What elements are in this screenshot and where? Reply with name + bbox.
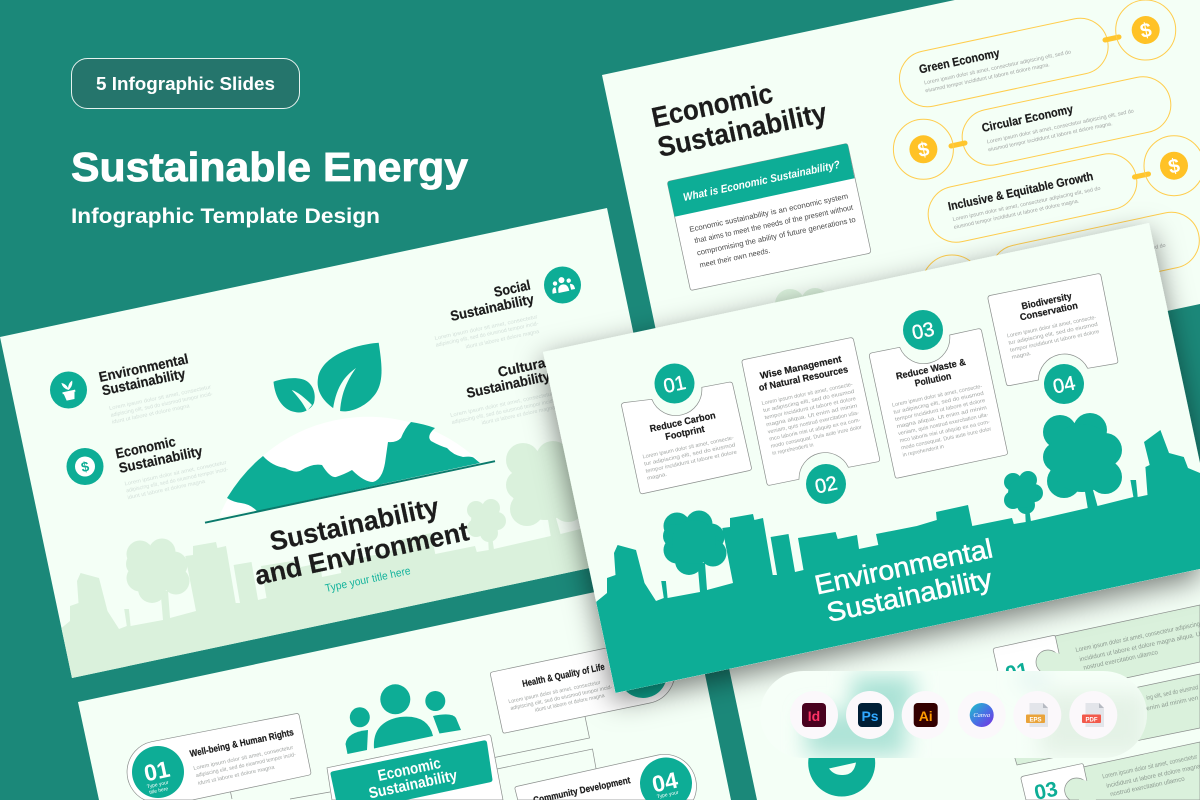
icon: group of people (346, 684, 461, 754)
item: cultural sustainability: idunt ut labore et dolore magna (481, 405, 556, 426)
card: health and quality of life: adipiscing elit, sed do eiusmod tempor incid- (510, 684, 613, 712)
pill: circular economy: eiusmod tempor incididunt ut labore et dolore magna. (988, 121, 1113, 153)
card: community development: 04 (650, 767, 680, 797)
heading: economic sustainability: Sustainability (655, 97, 830, 163)
toolbar: software format badges (760, 671, 1147, 758)
card 02: wise management of natural resources: of Natural Resources (758, 364, 849, 394)
item: economic sustainability: idunt ut labore et dolore magna (127, 479, 206, 501)
card 02: wise management of natural resources: tur adipiscing elit, sed do eiusmod (763, 389, 855, 414)
decorative tree tops (775, 288, 829, 319)
card 01: reduce carbon footprint: Footprint (664, 424, 707, 443)
subtitle: Infographic Template Design (71, 204, 380, 228)
card: well-being and human rights: Type your (146, 780, 169, 790)
callout: what is economic sustainability: Economic sustainability is an economic system (689, 191, 849, 234)
pill: fourth economy item: sed do (1149, 243, 1166, 252)
card: well-being and human rights: Lorem ipsum dolor sit amet, consectetur (193, 745, 294, 772)
card: well-being and human rights: title here (149, 786, 169, 796)
title: sustainability and environment: Sustainability (267, 492, 441, 557)
card 02: wise management of natural resources: magna aliqua. Ut enim ad minim (766, 403, 859, 428)
item: cultural sustainability: Sustainability (465, 368, 552, 401)
item: environmental sustainability: Sustainability (100, 365, 187, 398)
card 02: wise management of natural resources (742, 338, 880, 504)
item: environmental sustainability: idunt ut labore et dolore magna (112, 403, 190, 426)
pill: circular economy: Lorem ipsum dolor sit amet, consectetur adipiscing elit, sed do (986, 108, 1134, 145)
row 2 band (1002, 674, 1200, 765)
card 04: biodiversity conservation: Conservation (1019, 300, 1079, 323)
callout: what is economic sustainability: meet their own needs. (699, 246, 771, 270)
row 3 band (1083, 742, 1200, 800)
card: well-being and human rights: idunt ut labore et dolore magna (198, 765, 275, 787)
card 04: biodiversity conservation: tempor incididunt ut labore et dolore (1010, 329, 1100, 354)
icon: Canva: Canva (973, 712, 990, 719)
skyline with trees (596, 413, 1200, 693)
item: environmental sustainability: adipiscing elit, sed do eiusmod tempor incid- (110, 391, 213, 419)
icon: EPS file (1013, 691, 1061, 739)
row 3 band: nostrud exercitation ullamco (1110, 775, 1186, 798)
pill: inclusive and equitable growth (923, 136, 1200, 247)
item: economic sustainability: $ (80, 458, 91, 475)
pill: circular economy: $ (916, 138, 931, 162)
card 02: wise management of natural resources: in reprehenderit in (772, 442, 814, 457)
card 04: biodiversity conservation (988, 274, 1118, 404)
card 04: biodiversity conservation: tur adipiscing elit, sed do eiusmod (1008, 322, 1098, 347)
icon: sprouting leaves (274, 343, 382, 413)
pill: circular economy (893, 72, 1176, 179)
panel: economic sustainability slide (602, 0, 1200, 416)
pill: green economy: eiusmod tempor incididunt ut labore et dolore magna. (925, 62, 1050, 94)
panel: economic sustainability map slide (78, 573, 731, 800)
icon: InDesign: Id (808, 708, 820, 724)
icon: EPS file: EPS (1029, 717, 1042, 723)
card 04: biodiversity conservation: magna. (1011, 351, 1032, 361)
card: health and quality of life: Lorem ipsum dolor sit amet, consectetur (508, 680, 601, 705)
icon: PDF file: PDF (1086, 717, 1098, 723)
card 01: reduce carbon footprint: magna. (647, 472, 668, 482)
card 03: reduce waste and pollution: 03 (910, 318, 936, 345)
item: social sustainability: Social (492, 277, 532, 300)
item: economic sustainability: Sustainability (117, 443, 204, 476)
item: economic sustainability: Economic (114, 433, 177, 461)
title: sustainability and environment: Type your title here (324, 565, 412, 595)
main title: Sustainable Energy (71, 144, 468, 190)
icon: Canva (958, 691, 1006, 739)
connector lines (230, 716, 596, 799)
pill: inclusive and equitable growth: $ (1166, 155, 1182, 179)
globe with continents (205, 417, 495, 523)
row 1 band: nostrud exercitation ullamco (1083, 649, 1159, 672)
card: health and quality of life: idunt ut labore et dolore magna (534, 693, 605, 714)
card 03: reduce waste and pollution: in reprehenderit in (902, 444, 945, 459)
card 03: reduce waste and pollution: Reduce Waste & (895, 357, 967, 382)
title: environmental sustainability: Sustainability (824, 563, 995, 628)
item: cultural sustainability: adipiscing elit, sed do eiusmod tempor incid- (451, 398, 555, 426)
icon: InDesign (790, 691, 838, 739)
item: cultural sustainability: Cultural (496, 353, 550, 380)
title: environmental sustainability: Environmental (812, 533, 995, 600)
puzzle piece 03 (1021, 764, 1096, 800)
card 02: wise management of natural resources: veniam, quis nostrud exercitation ulla- (767, 410, 860, 436)
puzzle piece 01: 01 (1003, 658, 1031, 686)
card: well-being and human rights: 01 (142, 756, 172, 786)
item: social sustainability: adipiscing elit, sed do eiusmod tempor incid- (435, 321, 539, 349)
icon: smiling figure (808, 730, 875, 796)
card 02: wise management of natural resources: modo consequat. Duis aute irure dolor (770, 425, 863, 450)
card 03: reduce waste and pollution: magna aliqua. Ut enim ad minim (896, 405, 988, 430)
icon: PDF file (1069, 691, 1117, 739)
card: community development (515, 754, 696, 800)
row 1 band (1018, 605, 1200, 702)
skyline: pale city and trees (62, 441, 589, 678)
heading: economic sustainability: Economic (649, 77, 776, 133)
item: environmental sustainability (50, 350, 215, 426)
item: environmental sustainability: Environmental (97, 350, 190, 385)
callout: what is economic sustainability: compromising the ability of future generations to (696, 215, 856, 257)
icon: Photoshop (846, 691, 894, 739)
callout: what is economic sustainability: What is Economic Sustainability? (682, 159, 841, 204)
pill: fourth economy item (922, 207, 1200, 315)
item: environmental sustainability: Lorem ipsum dolor sit amet, consectetur (109, 384, 212, 412)
pill: inclusive and equitable growth: eiusmod tempor incididunt ut labore et dolore magna. (953, 198, 1080, 231)
item: economic sustainability (66, 433, 230, 501)
card 03: reduce waste and pollution: Lorem ipsum dolor sit amet, consecte- (892, 384, 983, 409)
puzzle piece 01 (993, 635, 1070, 703)
card 03: reduce waste and pollution: tur adipiscing elit, sed do eiusmod (893, 391, 984, 416)
row 2 band: enim ad minim ven (1146, 695, 1199, 712)
callout: what is economic sustainability: that aims to meet the needs of the present without (693, 203, 855, 245)
card 01: reduce carbon footprint: tempor incididunt ut labore et dolore (645, 450, 737, 475)
card 01: reduce carbon footprint: Lorem ipsum dolor sit amet, consecte- (642, 435, 735, 460)
card: health and quality of life: Health & Quality of Life (521, 662, 606, 690)
card 02: wise management of natural resources: Wise Management (759, 354, 843, 382)
pill: green economy: Lorem ipsum dolor sit amet, consectetur adipiscing elit, sed do (924, 49, 1072, 86)
item: economic sustainability: adipiscing elit, sed do eiusmod tempor incid- (126, 467, 229, 494)
title: environmental sustainability (812, 533, 995, 628)
item: social sustainability (434, 266, 581, 350)
card 03: reduce waste and pollution: veniam, quis nostrud exercitation ulla- (898, 412, 989, 437)
icon: Illustrator: Ai (919, 708, 933, 724)
card: well-being and human rights: adipiscing elit, sed do eiusmod tempor incid- (195, 752, 297, 779)
item: social sustainability: idunt ut labore et dolore magna (465, 329, 540, 350)
badge: 5 infographic slides (72, 58, 300, 108)
pill: green economy (894, 0, 1176, 112)
item: cultural sustainability (450, 353, 556, 426)
card 02: wise management of natural resources: tempor incididunt ut labore et dolore (764, 396, 856, 421)
pill: circular economy: Circular Economy (980, 102, 1075, 135)
pill: inclusive and equitable growth: Lorem ipsum dolor sit amet, consectetur adipiscing elit, sed do (952, 186, 1101, 223)
card: economic sustainability centre box (327, 735, 503, 800)
card 02: wise management of natural resources: 02 (813, 472, 839, 499)
card: health and quality of life (490, 641, 675, 733)
card 03: reduce waste and pollution: Pollution (914, 371, 952, 389)
pill: green economy: Green Economy (918, 46, 1001, 76)
card: economic sustainability centre box: Economic (376, 755, 443, 785)
badge: 5 infographic slides: 5 Infographic Slides (96, 74, 275, 94)
card 01: reduce carbon footprint (622, 364, 751, 494)
card 04: biodiversity conservation: 04 (1051, 372, 1077, 399)
card 03: reduce waste and pollution: tempor incididunt ut labore et dolore (895, 398, 986, 423)
item: cultural sustainability: Lorem ipsum dolor sit amet, consectetur (450, 391, 554, 419)
item: social sustainability: Sustainability (449, 291, 535, 324)
card: well-being and human rights (127, 713, 311, 800)
card: well-being and human rights: Well-being & Human Rights (189, 727, 295, 760)
card 04: biodiversity conservation: Biodiversity (1021, 291, 1073, 312)
panel: sustainability and environment slide (0, 208, 634, 678)
callout: what is economic sustainability (668, 144, 871, 290)
card 03: reduce waste and pollution (869, 310, 1008, 478)
icon: Photoshop: Ps (861, 708, 879, 724)
item: economic sustainability: Lorem ipsum dolor sit amet, consectetur (124, 460, 227, 487)
card 04: biodiversity conservation: Lorem ipsum dolor sit amet, consecte- (1007, 315, 1097, 339)
card: community development: Type your (656, 790, 679, 800)
card 01: reduce carbon footprint: 01 (662, 372, 688, 398)
panel: puzzle steps slide (723, 539, 1200, 800)
title: sustainability and environment: and Environment (252, 516, 471, 591)
card 01: reduce carbon footprint: Reduce Carbon (649, 410, 717, 435)
card 02: wise management of natural resources: mco laboris nisi ut aliquip ex ea com- (769, 417, 861, 443)
panel: environmental sustainability slide (543, 223, 1200, 693)
icon: Illustrator (902, 691, 950, 739)
pill: inclusive and equitable growth: Inclusive & Equitable Growth (947, 169, 1094, 213)
item: social sustainability: Lorem ipsum dolor sit amet, consectetur (434, 314, 538, 342)
card 03: reduce waste and pollution: modo consequat. Duis aute irure dolor (901, 426, 992, 451)
pill: green economy: $ (1138, 19, 1154, 43)
card 03: reduce waste and pollution: mco laboris nisi ut aliquip ex ea com- (899, 419, 991, 444)
card 02: wise management of natural resources: Lorem ipsum dolor sit amet, consecte- (761, 382, 854, 407)
card 01: reduce carbon footprint: tur adipiscing elit, sed do eiusmod (644, 442, 736, 468)
